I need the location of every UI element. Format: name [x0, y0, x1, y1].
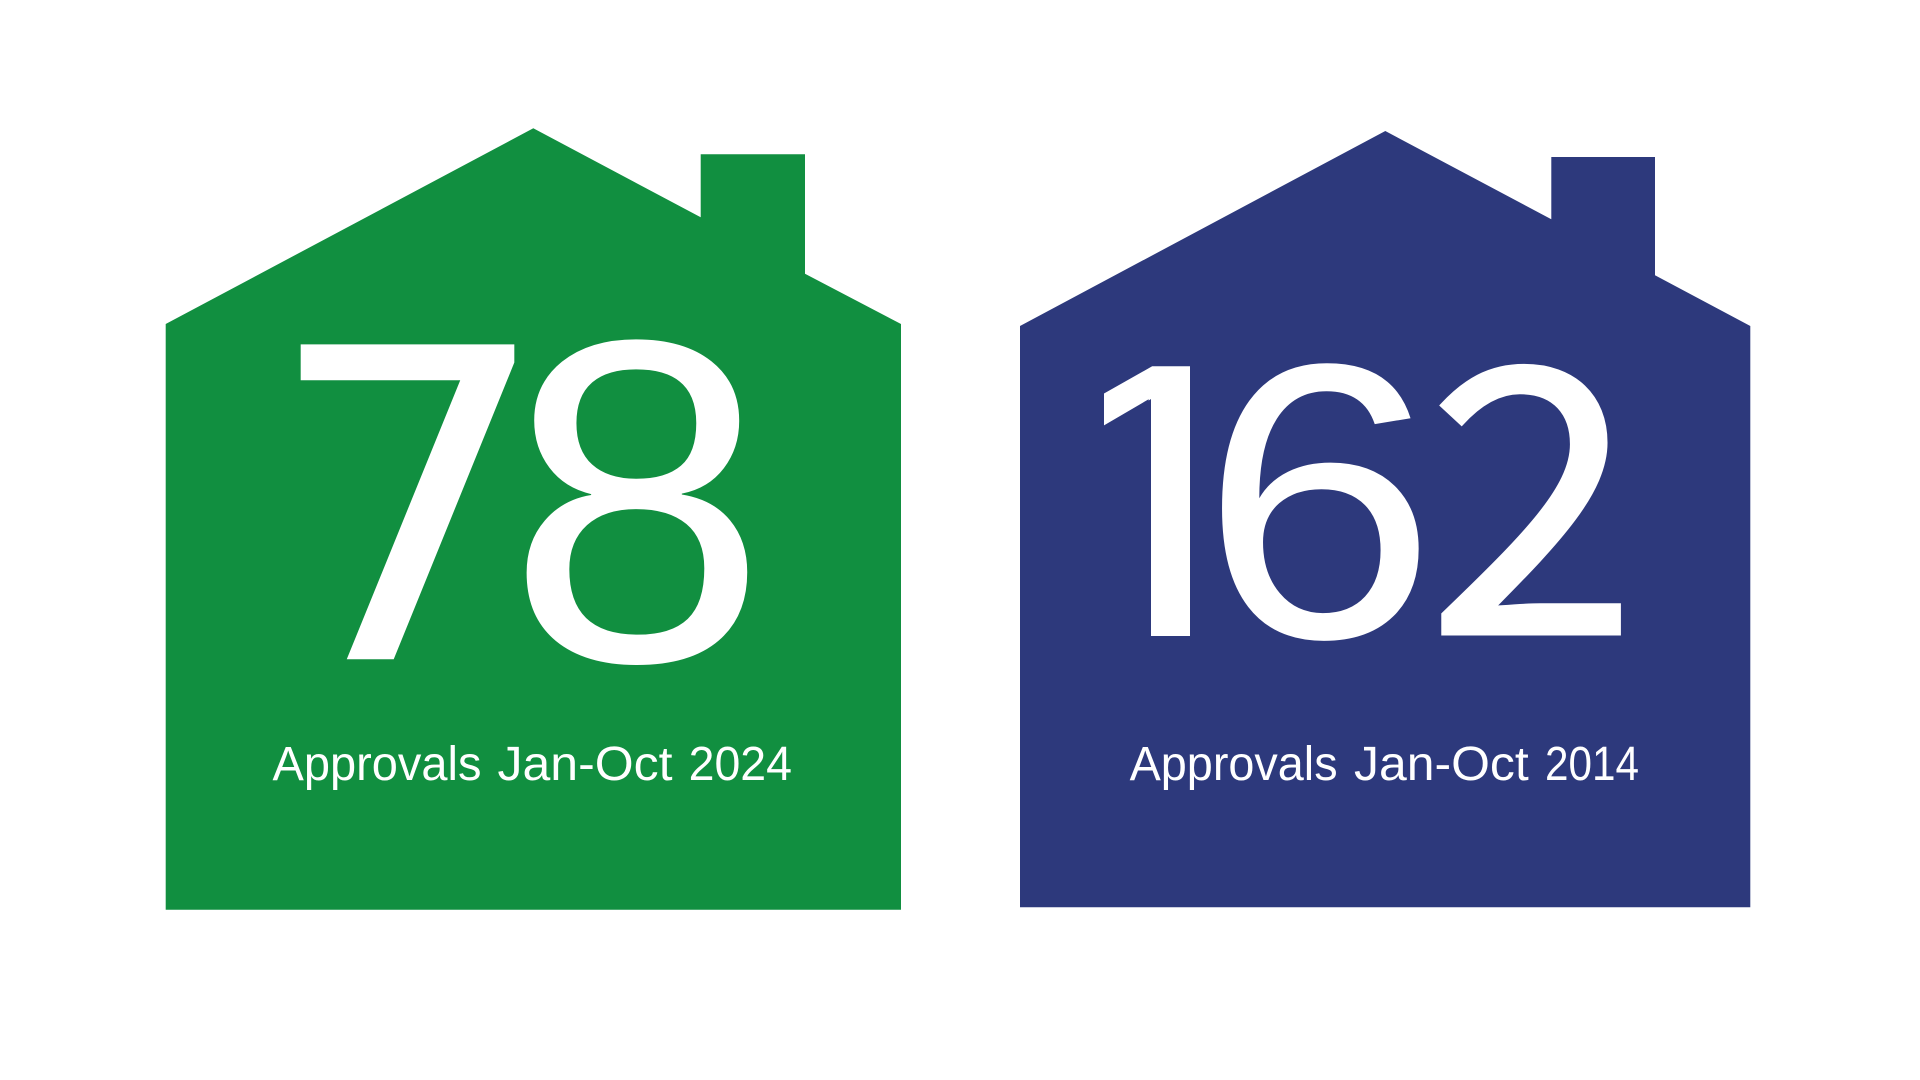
number: 78 approvals: [263, 244, 768, 761]
label: approvals Jan-Oct 2014: Approvals: [1130, 738, 1338, 791]
panel: green house 2024: [166, 128, 901, 910]
number: 78 approvals: 8: [506, 244, 768, 758]
label: approvals Jan-Oct 2024: 2024: [689, 738, 792, 791]
number: 162 approvals: 1: [1028, 281, 1294, 719]
label: approvals Jan-Oct 2024: Approvals: [272, 738, 482, 791]
icon: green house shape: [166, 128, 901, 910]
number: 162 approvals: 6: [1200, 282, 1437, 720]
label: approvals Jan-Oct 2024: Jan-Oct: [498, 738, 672, 791]
panel: navy house 2014: [1020, 131, 1750, 907]
label: approvals Jan-Oct 2014: 2014: [1545, 738, 1639, 791]
icon: navy house shape: [1020, 131, 1750, 907]
number: 78 approvals: 7: [263, 258, 553, 761]
number: 162 approvals: [1104, 363, 1621, 641]
number: 162 approvals: 2: [1426, 206, 1639, 741]
label: approvals Jan-Oct 2014: Jan-Oct: [1354, 738, 1529, 791]
